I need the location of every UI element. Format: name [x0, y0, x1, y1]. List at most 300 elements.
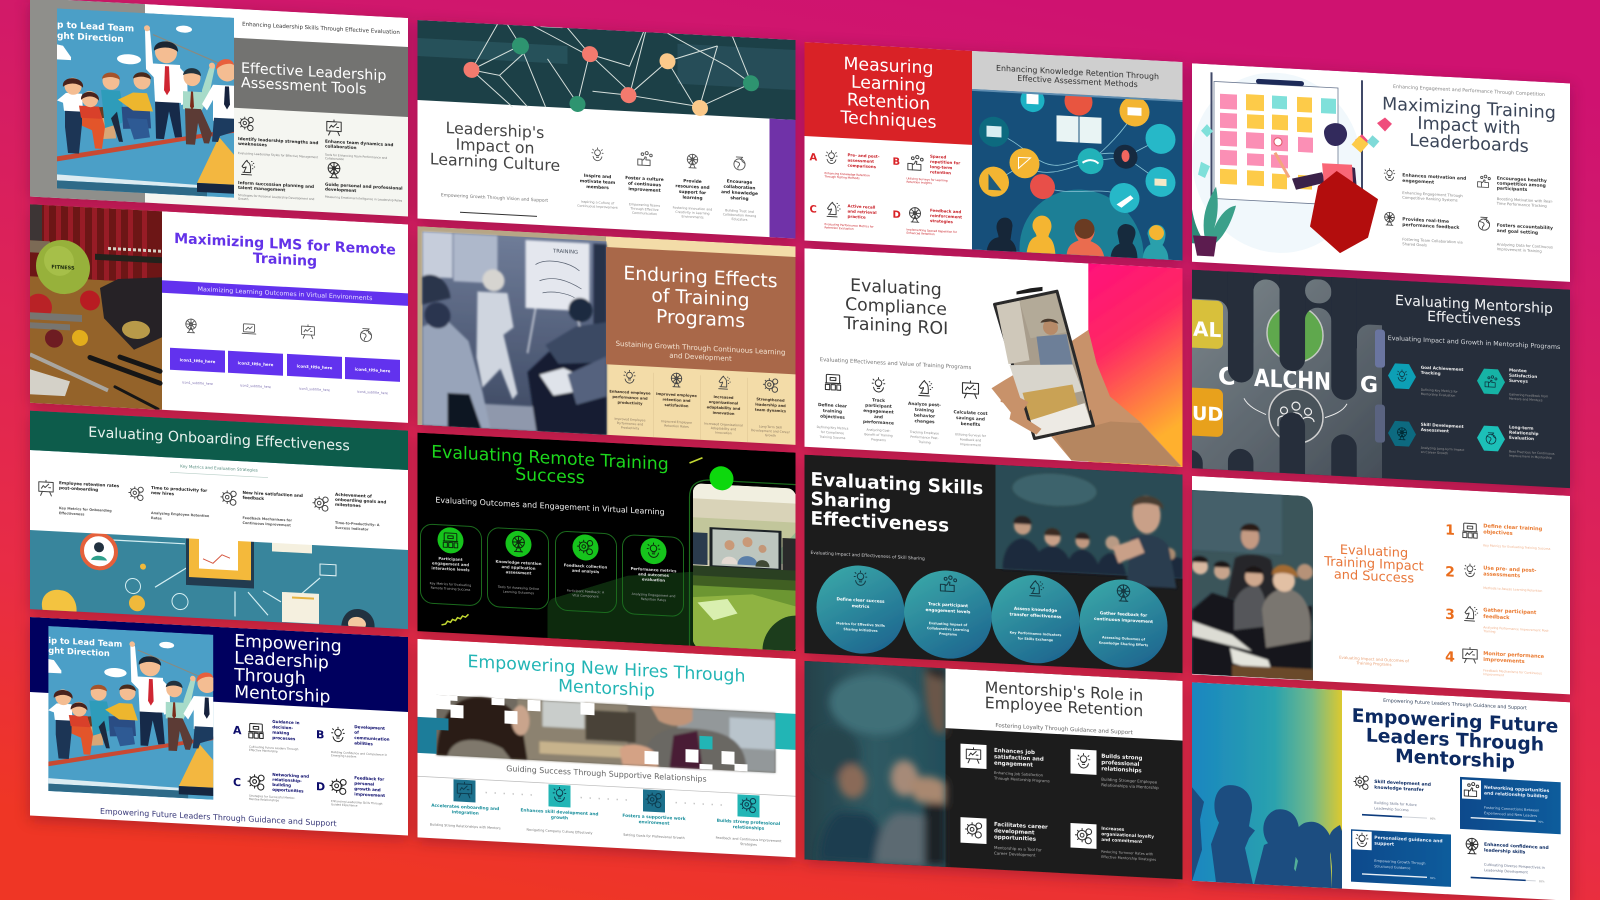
item: competition: Time Performance Tracking: [1496, 202, 1547, 208]
circle: metrics: metrics: [852, 603, 870, 609]
metric: skill development: [1388, 420, 1465, 456]
title: Maximizing LMS for Remote: [174, 231, 396, 259]
title block: and Development: [669, 352, 732, 363]
column: leadership: Long-Term Skill: [759, 424, 782, 430]
step 1: 1: [1445, 522, 1455, 539]
metric: satisfaction: Continuous Improvement: [242, 521, 291, 527]
column: resources: Fostering Innovation and: [673, 206, 712, 212]
card: feedback: Vital Component: [572, 593, 600, 599]
illustration: team on a seesaw: ght Direction: [57, 31, 124, 45]
title: Leaders Through: [1366, 725, 1544, 756]
item: career: [960, 817, 1048, 858]
card: knowledge: Tools for Assessing Online: [497, 585, 539, 591]
item: feedback: Shared Goals: [1402, 242, 1427, 247]
item: motivation: Enhances motivation and: [1402, 172, 1466, 182]
metric: skill development: Analyzing Long-term Impact: [1421, 446, 1465, 452]
item: motivation: [1384, 168, 1466, 203]
title: Training ROI: [843, 314, 948, 339]
column: culture: Communication: [632, 211, 657, 216]
column: culture: Through Effective: [629, 206, 659, 212]
step 3: feedback: [1483, 614, 1510, 621]
step: onboarding: integration: [452, 809, 479, 817]
step: onboarding: Building Strong Relationships with Mentors: [430, 823, 501, 830]
column: engagement: Analyzing Cost-: [866, 428, 891, 433]
subtitle: Evaluating Impact and Growth in Mentorship Programs: [1388, 335, 1560, 351]
item: satisfaction: Enhancing Job Satisfaction: [994, 771, 1044, 778]
image: coaching board through rounded stripes: [1187, 239, 1385, 510]
column: inspire: [577, 147, 618, 210]
metric: productivity: Time to productivity for: [151, 485, 208, 493]
metric: goal tracking: Defining Key Metrics for: [1421, 388, 1458, 394]
item C: opportunities: [272, 787, 304, 794]
box subtitles: icon3_subtitle_here: [299, 387, 330, 392]
metric: goals: Success Indicator: [335, 526, 369, 532]
metric: long term relationship: Best Practices for Continuous: [1509, 449, 1555, 456]
column: objectives: Training Success: [819, 435, 846, 440]
title: Evaluating Mentorship: [1395, 293, 1553, 317]
item: accountability: Fosters accountability: [1497, 222, 1553, 231]
metric: goal tracking: Mentorship Evaluation: [1421, 392, 1455, 398]
column: savings: benefits: [961, 421, 981, 428]
column dividers: [654, 373, 748, 443]
item C: Evaluating Performance Metrics for: [824, 222, 875, 229]
card: networking: Fostering Connections Between: [1484, 806, 1539, 813]
column: culture: [625, 150, 664, 216]
subtitle: Empowering Future Leaders Through Guidance and Support: [1383, 698, 1527, 711]
circle: transfer: Assess knowledge: [1014, 606, 1057, 613]
column: inspire: Inspiring a Culture of: [581, 200, 615, 205]
item A: A: [233, 724, 242, 737]
green dot accent: [710, 466, 734, 491]
column: collaboration: collaboration: [724, 184, 755, 191]
column: leadership: Growth: [765, 433, 776, 438]
metric: skill development: Skill Development: [1421, 422, 1464, 429]
photo: business team pointing: [996, 465, 1182, 589]
metric: productivity: new hires: [151, 490, 174, 496]
column: inspire: Inspire and: [584, 173, 611, 180]
header: [30, 411, 408, 470]
title block: Programs: [656, 307, 745, 332]
item C: and retrieval: [847, 208, 877, 215]
card: networking: 90%: [1538, 820, 1544, 824]
column: resources: resources and: [675, 183, 710, 191]
item: relationships: [1070, 749, 1159, 790]
card: personalized guidance: [1351, 829, 1451, 887]
item C: [234, 772, 309, 802]
circle: metrics: Metrics for Effective Skills: [836, 621, 885, 628]
illustration: team on a seesaw: [48, 626, 216, 800]
card: skill development: knowledge transfer: [1374, 785, 1425, 793]
illustration: person at sticky note board: [1192, 68, 1392, 266]
column: resources: learning: [682, 195, 703, 202]
metric: goal tracking: Tracking: [1421, 370, 1441, 376]
item A: Through Testing Methods: [824, 174, 860, 180]
header band: Effective Assessment Methods: [1017, 74, 1138, 89]
step 3: 3: [1445, 607, 1455, 623]
item: identify strengths: Evaluating Leadership Styles for Effective Management: [238, 151, 319, 159]
item B: abilities: [354, 740, 373, 746]
step: skills: Enhances skill development and: [520, 807, 599, 817]
column: collaboration: sharing: [730, 195, 749, 202]
metric: goals: milestones: [335, 502, 361, 508]
title: Sharing: [810, 489, 891, 514]
item: satisfaction: satisfaction and: [994, 754, 1044, 763]
column: savings: Improvement: [960, 442, 982, 447]
step: skills: growth: [551, 814, 568, 821]
metric: satisfaction surveys: Mentors and Mentees: [1509, 397, 1543, 402]
item B: Building Confidence and Competence in: [331, 750, 387, 757]
panel: Measuring Learning Retention Techniques: [804, 42, 1183, 319]
photo: hand holding phone: [992, 284, 1182, 466]
card: networking: and relationship building: [1484, 790, 1548, 800]
panel: Maximizing Training Impact with Leaderboards: [1192, 63, 1570, 282]
step: environment: Fosters a supportive work: [622, 813, 686, 822]
item A: Effective Mentorship: [249, 748, 278, 753]
illustration: team on a seesaw: ip to Lead Team: [48, 635, 122, 649]
item: accountability: Analyzing Data for Continuous: [1497, 242, 1553, 249]
column: collaboration: and knowledge: [721, 189, 758, 197]
item C: Retention Evaluation: [824, 225, 854, 231]
item B: retention: [930, 169, 951, 175]
item: career: Career Development: [994, 850, 1036, 858]
column: behavior: changes: [914, 418, 935, 425]
title block: Retention: [847, 90, 930, 115]
item B: Development: [354, 724, 385, 731]
item B: of: [354, 730, 359, 735]
photo: fitness and tool still life: [26, 204, 162, 410]
title block: Sustaining Growth Through Continuous Learning: [616, 340, 785, 357]
item: competition: [1478, 174, 1553, 209]
metric: productivity: Rates: [151, 516, 162, 521]
item: succession planning: talent management: [238, 185, 285, 193]
step 2: Use pre- and post-: [1483, 565, 1536, 574]
panel: Leadership's Impact on Learning Culture: [418, 15, 796, 239]
illustration: team on a seesaw: ght Direction: [48, 645, 110, 658]
circle: feedback: Knowledge Sharing Efforts: [1099, 641, 1148, 647]
photo: group workshop: TRAINING: [552, 248, 578, 256]
title: and Success: [1334, 567, 1414, 587]
subtitle band: [162, 280, 408, 306]
column: leadership: leadership and: [755, 403, 786, 408]
column: behavior: [908, 380, 941, 445]
title block: Employee Retention: [985, 693, 1143, 720]
column: engagement: [863, 377, 894, 443]
title: Impact on: [456, 135, 534, 158]
card: knowledge: Learning Outcomes: [503, 590, 534, 595]
circle: transfer: [992, 573, 1080, 666]
column: resources: Environments: [681, 214, 704, 220]
column: collaboration: Building Trust and: [725, 208, 754, 214]
metric: satisfaction: feedback: [242, 495, 264, 501]
card: networking: Experienced and New Leaders: [1484, 811, 1537, 818]
illustration: connected learning: [972, 82, 1183, 319]
column: behavior: Training: [917, 440, 931, 445]
column: adaptability: Innovation: [715, 430, 732, 435]
box labels: icon2_title_here: [238, 360, 274, 367]
column: behavior: Tracking Employee: [909, 430, 939, 435]
item D: [317, 776, 385, 807]
metric: satisfaction surveys: [1477, 366, 1548, 403]
card: engagement: interaction levels: [431, 565, 470, 572]
box labels: icon1_title_here: [180, 357, 216, 364]
column: performance: performance and: [612, 395, 648, 401]
column: performance: productivity: [618, 401, 643, 406]
step 2: 2: [1445, 564, 1455, 581]
card: feedback: Feedback collection: [564, 562, 607, 570]
step: relationships: relationships: [733, 824, 765, 832]
column: retention: Improved employee: [656, 392, 697, 398]
item B: [892, 152, 960, 187]
card: personalized guidance: 80%: [1430, 876, 1436, 880]
column: leadership: Development and Career: [751, 428, 791, 434]
metric: skill development: on Career Growth: [1421, 450, 1448, 455]
item: career: Facilitates career: [994, 822, 1048, 831]
illustration: connected ideas: [42, 533, 375, 628]
card: knowledge: Knowledge retention: [495, 559, 542, 566]
item D: D: [892, 210, 901, 221]
title: Impact with: [1417, 114, 1521, 139]
column: engagement: Benefit of Training: [864, 432, 893, 438]
card: confidence: [1466, 838, 1549, 884]
title: Training Impact: [1323, 554, 1424, 575]
title: Through: [233, 665, 306, 689]
column: engagement: and: [874, 414, 883, 420]
panel: Empowering New Hires Through Mentorship: [418, 639, 796, 858]
circle: metrics: Sharing Initiatives: [843, 627, 878, 633]
column: leadership: team dynamics: [755, 408, 786, 413]
subtitle: [170, 463, 268, 478]
metric: goals: Time-to-Productivity: A: [335, 521, 380, 527]
step 3: Gather participant: [1483, 607, 1537, 616]
metric: retention: Key Metrics for Onboarding: [59, 506, 112, 513]
step 2: [1445, 563, 1542, 593]
column: retention: Retention Rates: [664, 424, 689, 429]
box subtitles: icon1_subtitle_here: [182, 380, 213, 386]
item C: C: [810, 204, 817, 216]
title: Compliance: [845, 295, 947, 320]
item D: personal: [354, 781, 375, 787]
column: adaptability: innovation: [713, 411, 735, 416]
panel: Evaluating Training Impact and Success: [1192, 476, 1570, 695]
column: retention: Improved Employee: [661, 419, 692, 425]
panel: Evaluating Skills Sharing Effectiveness: [804, 455, 1182, 674]
item B: communication: [354, 735, 390, 742]
card: feedback: Participant Feedback: A: [567, 589, 605, 595]
metric: satisfaction surveys: Surveys: [1509, 378, 1528, 384]
item A: Guidance in: [272, 719, 300, 725]
title: Leadership: [234, 648, 329, 673]
subtitle: Key Metrics and Evaluation Strategies: [180, 464, 258, 473]
header band: Enhancing Knowledge Retention Through: [996, 64, 1159, 81]
circle: transfer: Key Performance Indicators: [1010, 630, 1061, 637]
card: personalized guidance: Empowering Growth Through: [1374, 859, 1426, 866]
title: Leaderboards: [1409, 131, 1529, 157]
subtitle: Evaluating Impact and Outcomes of: [1339, 655, 1410, 663]
title: Evaluating Remote Training: [431, 442, 669, 475]
item C: relationship-: [272, 777, 302, 783]
item: personal development: [325, 162, 403, 203]
title block: [804, 42, 972, 145]
title: Leadership's: [446, 118, 544, 142]
box labels: icon4_title_here: [355, 367, 391, 373]
photo: video conference room: [692, 483, 796, 654]
title block: Enduring Effects: [623, 263, 778, 292]
item C: Mentee Relationships: [249, 797, 279, 803]
illustration: silhouettes on gradient: [1192, 682, 1342, 889]
item: career: Mentorship as a Tool for: [994, 845, 1042, 852]
column: performance: Performance and: [617, 421, 643, 426]
item: motivation: Enhancing Engagement Through: [1402, 191, 1463, 198]
column: savings: Utilizing Surveys for: [955, 432, 987, 438]
item A: processes: [272, 735, 296, 741]
circle: engagement: Evaluating Impact of: [929, 621, 968, 627]
card: engagement: Remote Training Success: [431, 586, 471, 592]
step: environment: Setting Goals for Professional Growth: [623, 833, 685, 840]
step 4: Improvement: [1483, 672, 1505, 677]
subtitle: Enhancing Engagement and Performance Through Competition: [1393, 84, 1545, 98]
title: Mentorship: [234, 682, 330, 707]
item: identify strengths: Identify leadership strengths and: [238, 136, 318, 146]
circle: feedback: Gather feedback for: [1100, 610, 1148, 618]
title block: Mentorship's Role in: [985, 677, 1143, 705]
image: coaching board through rounded stripes: C: [1218, 362, 1236, 391]
item: competition: participants: [1497, 185, 1528, 193]
image: coaching board through rounded stripes: AL: [1193, 317, 1221, 342]
title block: Fostering Loyalty Through Guidance and Support: [995, 723, 1133, 736]
item D: Guided Experience: [331, 802, 358, 808]
circle: feedback: [1080, 577, 1168, 670]
column: adaptability: adaptability and: [707, 405, 741, 411]
card: performance: evaluation: [642, 576, 665, 583]
column: performance: Productivity: [621, 425, 639, 430]
step: relationships: Strategies: [740, 842, 757, 847]
item D: reinforcement: [930, 213, 962, 220]
metric: long term relationship: [1477, 423, 1555, 460]
card: engagement: Participant: [438, 556, 463, 562]
item: team dynamics: Collaboration: [325, 156, 344, 161]
column: behavior: behavior: [914, 412, 936, 420]
column: culture: improvement: [628, 186, 661, 194]
metric: retention: Effectiveness: [59, 511, 84, 516]
item A: Enhancing Knowledge Retention: [824, 171, 870, 177]
circle: transfer: for Skills Exchange: [1018, 636, 1054, 642]
underline accent: [460, 212, 537, 217]
column: engagement: participant: [865, 403, 892, 410]
card: skill development: Building Skills for Future: [1374, 801, 1417, 807]
column: adaptability: Adaptability and: [711, 426, 736, 431]
dash accent: [690, 457, 702, 464]
item: relationships: Builds strong: [1101, 754, 1142, 762]
item: loyalty: Reducing Turnover Rates with: [1101, 850, 1153, 856]
panel: Empowering Leadership Through Mentorship: [30, 617, 408, 836]
step 4: Monitor performance: [1483, 651, 1545, 660]
item D: strategies: [930, 218, 954, 224]
card: engagement: [420, 524, 482, 606]
metric: goals: onboarding goals and: [335, 497, 386, 504]
card: confidence: Enhanced confidence and: [1484, 842, 1549, 851]
title block: Measuring: [844, 54, 933, 79]
box subtitles: [182, 380, 388, 395]
item: loyalty: and commitment: [1101, 837, 1142, 845]
illustration: team on a seesaw: [57, 8, 237, 198]
step: environment: environment: [639, 819, 669, 827]
item: succession planning: Strategies for Personal Leadership Development and: [238, 193, 315, 201]
panel: Evaluating Onboarding Effectiveness: [30, 411, 408, 634]
card: confidence: 85%: [1539, 879, 1545, 883]
card: confidence: leadership skills: [1484, 847, 1526, 856]
subtitle: Enhancing Leadership Skills Through Effective Evaluation: [242, 22, 400, 36]
title: Effectiveness: [1427, 309, 1521, 330]
column: culture: of continuous: [628, 181, 661, 188]
item C: Networking and: [272, 772, 309, 779]
column: engagement: Track: [872, 397, 885, 404]
item: feedback: performance feedback: [1402, 222, 1460, 231]
circle: transfer: transfer effectiveness: [1010, 611, 1062, 619]
item B: long-term: [930, 164, 952, 170]
column: behavior: training: [915, 407, 934, 414]
step: environment: [622, 788, 686, 840]
item A: making: [272, 730, 289, 736]
item A: A: [810, 152, 817, 164]
column: engagement: Programs: [871, 437, 886, 442]
panel: Evaluating Remote Training Success: [418, 433, 796, 654]
item D: [892, 206, 962, 238]
step 1: objectives: [1483, 529, 1513, 537]
item B: Retention Insights: [906, 180, 932, 185]
item: succession planning: Growth: [238, 197, 249, 201]
panel: Evaluating Compliance Training ROI: [804, 248, 1183, 467]
item: accountability: [1478, 217, 1553, 254]
item D: Enhancing Leadership Skills Through: [331, 799, 383, 806]
step 3: Training: [1482, 629, 1496, 634]
card: performance: [622, 534, 684, 617]
item: competition: Encourages healthy: [1497, 175, 1547, 184]
card: feedback: [556, 531, 616, 613]
step 2: assessments: [1483, 571, 1520, 579]
column: behavior: Analyze post-: [908, 401, 941, 409]
step: relationships: Builds strong professional: [717, 818, 781, 827]
card: skill development: Skill development and: [1374, 779, 1431, 788]
step 2: Methods to Assess Learning Retention: [1483, 586, 1542, 593]
item: personal development: Guide personal and professional: [325, 182, 403, 192]
card: performance: Retention Rates: [641, 597, 667, 602]
column: collaboration: [721, 156, 758, 222]
column: retention: satisfaction: [664, 403, 689, 408]
step: onboarding: [430, 778, 501, 830]
item C: practice: [847, 214, 866, 220]
column: savings: savings and: [956, 415, 985, 423]
item B: B: [316, 728, 324, 742]
item: accountability: and goal setting: [1497, 228, 1538, 236]
item: relationships: relationships: [1101, 766, 1142, 774]
header band: [972, 51, 1183, 100]
step 4: [1445, 646, 1545, 679]
image: coaching board through rounded stripes: UD: [1192, 403, 1223, 426]
title: Empowering: [234, 631, 342, 657]
column: adaptability: Increased Organizational: [704, 421, 743, 428]
item: satisfaction: Through Mentorship Programs: [993, 776, 1050, 783]
title: Mentorship: [1395, 746, 1515, 773]
column: savings: Calculate cost: [953, 409, 988, 417]
step 4: improvements: [1483, 657, 1525, 665]
card: performance: and outcomes: [638, 571, 670, 578]
photo: fitness and tool still life: FITNESS: [51, 264, 75, 272]
card: skill development: Leadership Success: [1374, 806, 1409, 812]
circle: metrics: [816, 563, 904, 656]
metric: satisfaction: New hire satisfaction and: [242, 490, 303, 498]
column: culture: Foster a culture: [625, 175, 664, 183]
column: performance: [609, 369, 651, 431]
